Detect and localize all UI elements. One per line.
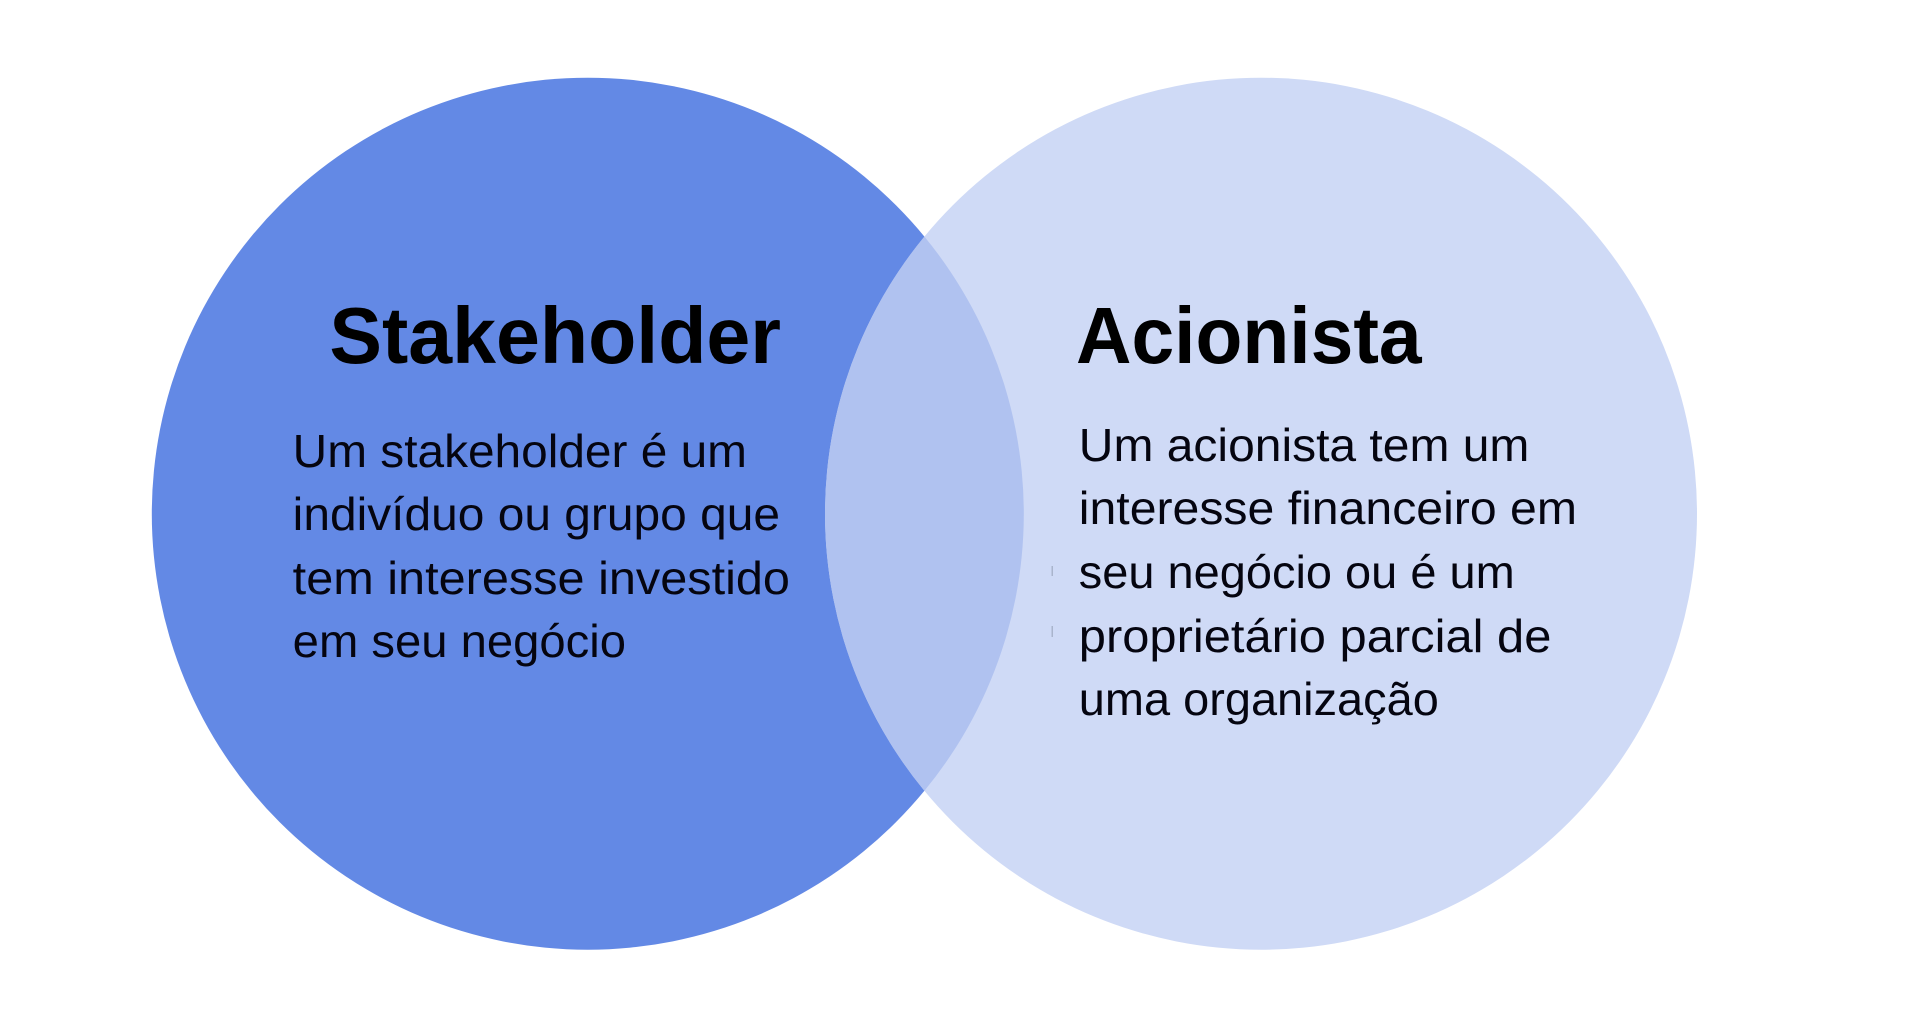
text block: acionista definition bbox=[1079, 419, 1577, 725]
text block: stakeholder definition: Um stakeholder é um bbox=[293, 425, 747, 477]
text block: stakeholder definition bbox=[293, 425, 790, 667]
circle: stakeholder bbox=[152, 78, 1024, 950]
text block: stakeholder definition: em seu negócio bbox=[293, 615, 626, 667]
small artifact marks bbox=[1052, 566, 1053, 637]
text block: acionista definition: proprietário parcial de bbox=[1079, 610, 1551, 662]
text block: acionista definition: uma organização bbox=[1079, 673, 1439, 725]
overlap region bbox=[825, 236, 1024, 790]
text block: acionista definition: interesse financeiro em bbox=[1079, 482, 1577, 534]
text block: stakeholder definition: indivíduo ou grupo que bbox=[293, 488, 780, 540]
panel: stakeholder text bbox=[293, 291, 790, 667]
text block: stakeholder definition: tem interesse investido bbox=[293, 552, 790, 604]
venn diagram bbox=[152, 78, 1697, 950]
panel: acionista text bbox=[1076, 291, 1577, 725]
heading: Stakeholder: Stakeholder bbox=[329, 291, 781, 380]
text block: acionista definition: Um acionista tem um bbox=[1079, 419, 1529, 471]
circle: acionista bbox=[825, 78, 1697, 950]
text block: acionista definition: seu negócio ou é um bbox=[1079, 546, 1515, 598]
heading: Acionista: Acionista bbox=[1076, 291, 1422, 380]
